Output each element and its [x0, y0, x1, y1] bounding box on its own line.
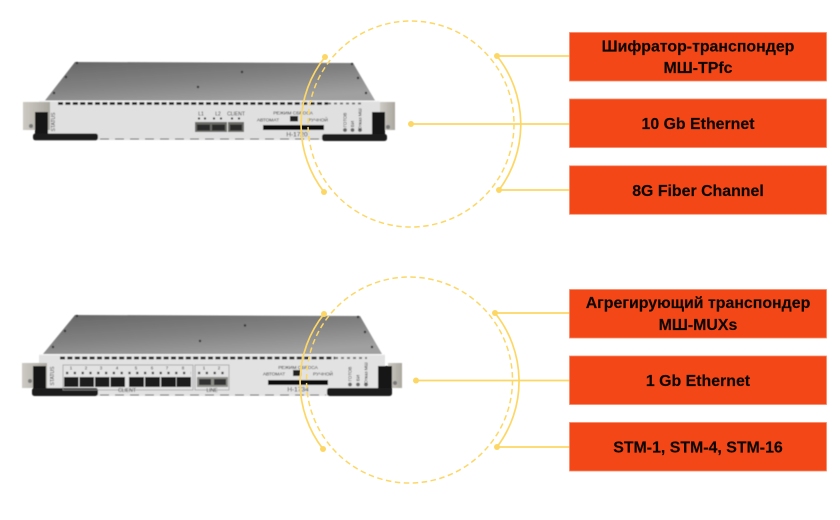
connector lines — [411, 56, 570, 190]
line port LEDs — [198, 372, 228, 374]
line port label: LINE — [206, 388, 218, 394]
port labels: CLIENT — [227, 112, 245, 118]
label: Агрегирующий транспондер МШ-MUXs: МШ-MUXs — [659, 317, 737, 334]
client port LEDs — [66, 372, 191, 374]
line port numbers: 2 — [218, 366, 221, 370]
line SFP ports — [197, 377, 228, 387]
label: Агрегирующий транспондер МШ-MUXs: Агрегирующий транспондер — [586, 295, 811, 312]
status label: STATUS — [51, 112, 57, 131]
client port numbers: 5 — [135, 366, 138, 370]
client port numbers: 2 — [85, 366, 88, 370]
reset mode controls: РЕЖИМ СБРОСА — [278, 365, 319, 371]
connector dots — [321, 53, 502, 195]
right ear and latch — [327, 363, 402, 396]
label: Шифратор-транспондер МШ-TPfc: МШ-TPfc — [664, 60, 733, 77]
indicator LEDs — [343, 128, 362, 132]
bottom panel dashes — [100, 138, 322, 140]
cover screws — [53, 62, 367, 94]
client port numbers: 4 — [116, 366, 119, 370]
solid left arc — [301, 57, 325, 192]
indicator labels: ГОТОВ — [348, 367, 352, 381]
label: STM-1, STM-4, STM-16 — [570, 422, 826, 471]
client port numbers: 3 — [100, 366, 103, 370]
status label: STATUS — [50, 366, 56, 385]
callout rings: bottom group — [300, 277, 570, 483]
port labels: L2 — [215, 112, 221, 118]
label: 1 Gb Ethernet: 1 Gb Ethernet — [646, 373, 751, 390]
right ear and latch — [322, 102, 395, 141]
cover screws — [52, 315, 373, 348]
connector lines — [416, 313, 570, 447]
indicator labels — [348, 362, 368, 384]
client port frame — [63, 365, 193, 390]
front panel — [39, 354, 385, 396]
line port frame — [195, 365, 229, 390]
device: module Н-1720 — [23, 62, 395, 141]
ventilation strip end — [335, 357, 367, 359]
reset mode controls: РУЧНОЙ — [308, 116, 329, 124]
client port numbers: 7 — [166, 366, 169, 370]
top cover plate — [43, 315, 382, 354]
port LEDs — [198, 117, 240, 120]
ventilation strip — [60, 357, 335, 359]
reset mode controls: РЕЖИМ СБРОСА — [273, 110, 314, 116]
label: 1 Gb Ethernet — [570, 356, 826, 404]
indicator labels: Отказ МШ — [358, 108, 362, 130]
label: 10 Gb Ethernet — [570, 99, 826, 148]
top cover plate — [45, 62, 375, 100]
indicator labels: ГОТОВ — [342, 113, 348, 127]
model label: Н-1720 — [286, 132, 308, 138]
device: module Н-1734 — [22, 315, 402, 396]
client SFP ports — [64, 377, 191, 387]
left ear and latch — [23, 102, 98, 140]
card slot — [268, 380, 328, 385]
indicator labels: Отказ МШ — [364, 362, 368, 384]
left ear and latch — [22, 363, 98, 396]
indicator labels — [342, 108, 362, 130]
reset mode controls: АВТОМАТ — [263, 372, 285, 378]
card slot — [263, 125, 324, 130]
label: 10 Gb Ethernet: 10 Gb Ethernet — [641, 116, 755, 133]
solid left arc — [300, 314, 324, 449]
line port numbers — [203, 366, 221, 370]
client port numbers: 6 — [151, 366, 154, 370]
connector dots — [320, 310, 500, 452]
model label: Н-1734 — [287, 386, 309, 394]
dashed circle — [308, 21, 514, 227]
indicator LEDs — [348, 383, 368, 386]
indicator labels: БИ — [350, 121, 355, 127]
client port numbers: 8 — [182, 366, 185, 370]
bottom panel dashes — [100, 394, 326, 396]
client port numbers — [70, 366, 185, 370]
indicator labels: БИ — [356, 375, 360, 381]
line port numbers: 1 — [203, 366, 206, 370]
front panel — [39, 100, 380, 140]
reset mode controls — [257, 110, 329, 124]
client port label: CLIENT — [118, 388, 136, 394]
ventilation strip end — [328, 102, 362, 104]
label: 8G Fiber Channel: 8G Fiber Channel — [632, 183, 764, 200]
reset mode controls: АВТОМАТ — [257, 118, 279, 124]
label: Агрегирующий транспондер МШ-MUXs — [570, 290, 826, 338]
ventilation strip — [58, 102, 328, 105]
reset mode controls: РУЧНОЙ — [313, 370, 334, 378]
label: STM-1, STM-4, STM-16: STM-1, STM-4, STM-16 — [613, 440, 783, 456]
SFP ports — [195, 122, 244, 132]
label: 8G Fiber Channel — [570, 166, 826, 214]
label: Шифратор-транспондер МШ-TPfc — [570, 32, 826, 81]
solid right arc — [497, 56, 521, 190]
client port numbers: 1 — [70, 366, 73, 370]
label: Шифратор-транспондер МШ-TPfc: Шифратор-транспондер — [602, 38, 795, 56]
port labels: L1 — [198, 112, 204, 118]
solid right arc — [495, 313, 519, 447]
dashed circle — [306, 277, 512, 483]
port labels — [198, 112, 245, 118]
callout rings: top group — [301, 21, 570, 227]
reset mode controls — [263, 365, 334, 378]
